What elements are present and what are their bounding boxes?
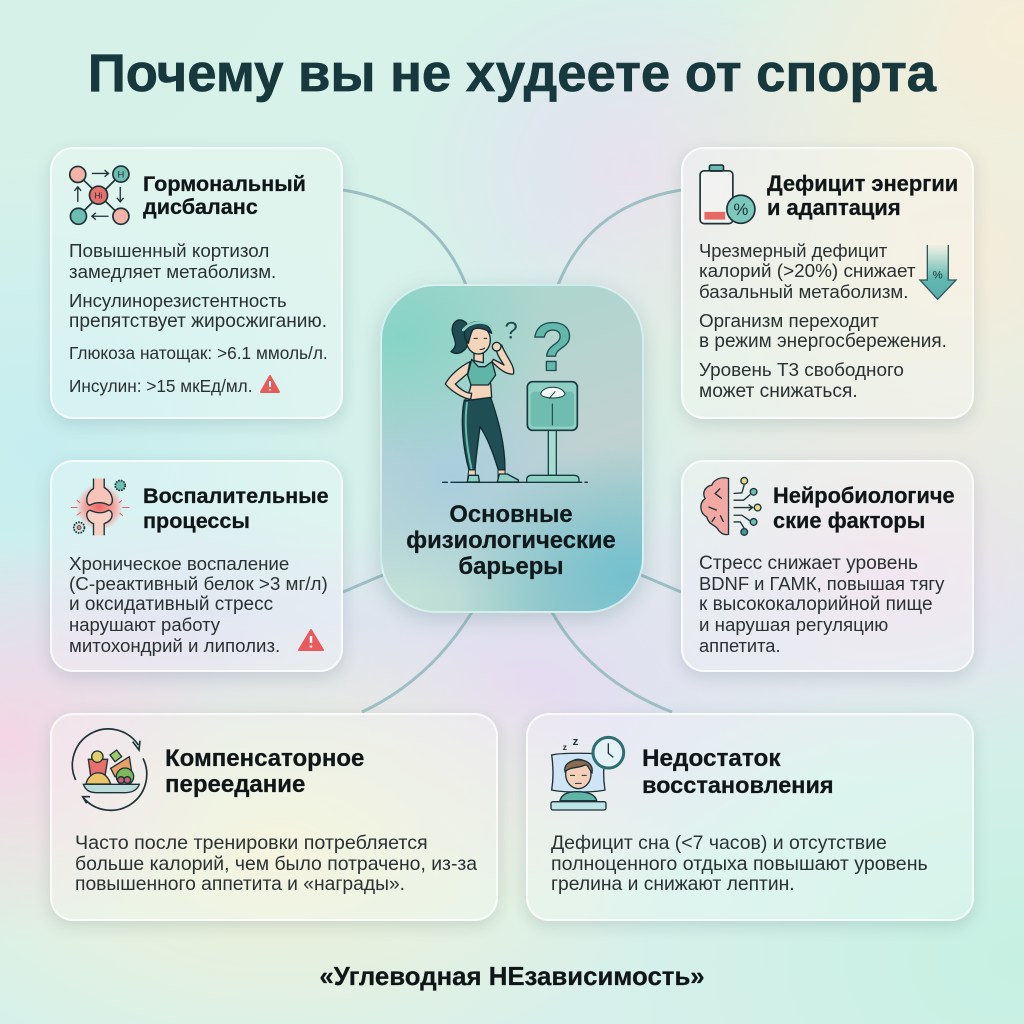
text: insulin resistance: препятствует жиросжиганию. xyxy=(69,311,327,332)
icon: battery: % xyxy=(733,200,748,219)
text: stress: Стресс снижает уровень xyxy=(699,553,918,574)
panel: lack of recovery xyxy=(521,713,978,931)
heading: Нейробиологиче xyxy=(773,483,955,508)
heading line 2: и адаптация xyxy=(767,195,901,220)
icon: sleeping person with clock: z xyxy=(563,742,568,752)
text: recovery: грелина и снижают лептин. xyxy=(551,874,795,895)
icon: hormone network xyxy=(68,165,130,226)
text: calories xyxy=(699,240,916,302)
icon: warning xyxy=(298,629,324,651)
icon: food plate cycle xyxy=(71,728,148,812)
icon: warning xyxy=(260,375,280,393)
heading: Недостаток xyxy=(642,745,781,772)
title: Почему вы не худеете от спорта xyxy=(88,44,936,103)
text: recovery: Дефицит сна (<7 часов) и отсутствие xyxy=(551,832,887,854)
text: chronic inflammation: нарушают работу xyxy=(69,614,220,635)
text: stress: к высококалорийной пище xyxy=(699,594,933,615)
icon: down arrow: % xyxy=(933,269,943,281)
text: recovery: полноценного отдыха повышают уровень xyxy=(551,853,928,875)
text: stress: аппетита. xyxy=(699,635,781,656)
icon: inflamed joint xyxy=(70,478,130,536)
text: chronic inflammation xyxy=(69,553,328,656)
panel: inflammation xyxy=(45,460,348,682)
panel: compensatory overeating xyxy=(44,712,503,931)
text: energy saving: Организм переходит xyxy=(699,310,879,331)
text: insulin: Инсулин: >15 мкЕд/мл. xyxy=(69,376,252,396)
text: chronic inflammation: Хроническое воспаление xyxy=(69,553,289,574)
text: calories: базальный метаболизм. xyxy=(699,281,908,302)
heading: Дефицит энергии xyxy=(767,171,958,196)
icon: sleeping person with clock xyxy=(550,736,626,811)
text: insulin resistance: Инсулинорезистентность xyxy=(69,290,287,311)
hub heading: физиологические xyxy=(406,527,616,554)
text: T3: может снижаться. xyxy=(699,381,858,402)
text: T3: Уровень Т3 свободного xyxy=(699,360,904,381)
text: chronic inflammation: (С-реактивный белок >3 мг/л) xyxy=(69,573,328,594)
hub heading xyxy=(406,501,616,580)
illustration: woman and scale: ? xyxy=(504,317,518,344)
icon: hormone network: Hi xyxy=(94,191,103,201)
hub heading: барьеры xyxy=(458,553,564,580)
text: chronic inflammation: митохондрий и липолиз. xyxy=(69,635,280,656)
text: recovery xyxy=(551,832,928,895)
icon: sleeping person with clock: z xyxy=(573,736,579,748)
panel: central hub xyxy=(372,282,652,628)
text: chronic inflammation: и оксидативный стресс xyxy=(69,594,273,615)
text: insulin resistance xyxy=(69,290,327,332)
illustration: woman and scale: ? xyxy=(532,310,574,386)
heading: Воспалительные xyxy=(143,483,329,508)
text: cortisol xyxy=(69,240,276,282)
heading line 2: ские факторы xyxy=(773,508,925,533)
text: stress xyxy=(699,553,944,656)
text: overeating: больше калорий, чем было потрачено, из-за xyxy=(75,853,477,875)
illustration: woman and scale xyxy=(442,310,588,483)
text: overeating xyxy=(75,832,478,895)
text: cortisol: Повышенный кортизол xyxy=(69,240,269,261)
icon: battery xyxy=(699,164,756,224)
text: calories: Чрезмерный дефицит xyxy=(699,240,887,261)
text: calories: калорий (>20%) снижает xyxy=(699,261,916,282)
heading: Гормональный xyxy=(143,171,306,196)
text: glucose: Глюкоза натощак: >6.1 ммоль/л. xyxy=(69,343,328,363)
text: overeating: повышенного аппетита и «награды». xyxy=(75,874,405,895)
heading line 2: дисбаланс xyxy=(143,194,258,219)
text: T3 xyxy=(699,360,904,402)
text: energy saving xyxy=(699,310,947,352)
panel: hormonal imbalance xyxy=(46,147,348,428)
icon: hormone network: H xyxy=(118,169,124,179)
hub heading: Основные xyxy=(449,501,573,528)
heading line 2: процессы xyxy=(143,508,250,533)
icon: brain xyxy=(700,476,762,536)
text: cortisol: замедляет метаболизм. xyxy=(69,261,276,282)
panel: neurobiological xyxy=(676,459,979,682)
text: overeating: Часто после тренировки потребляется xyxy=(75,832,428,854)
text: energy saving: в режим энергосбережения. xyxy=(699,331,947,352)
text: stress: BDNF и ГАМК, повышая тягу xyxy=(699,573,944,594)
icon: down arrow xyxy=(918,245,958,300)
panel: energy deficit xyxy=(676,146,980,430)
text: stress: и нарушая регуляцию xyxy=(699,614,888,635)
heading line 2: переедание xyxy=(165,771,305,798)
heading line 2: восстановления xyxy=(642,772,834,798)
heading: Компенсаторное xyxy=(165,745,364,772)
footer brand: «Углеводная НЕзависимость» xyxy=(319,963,705,991)
